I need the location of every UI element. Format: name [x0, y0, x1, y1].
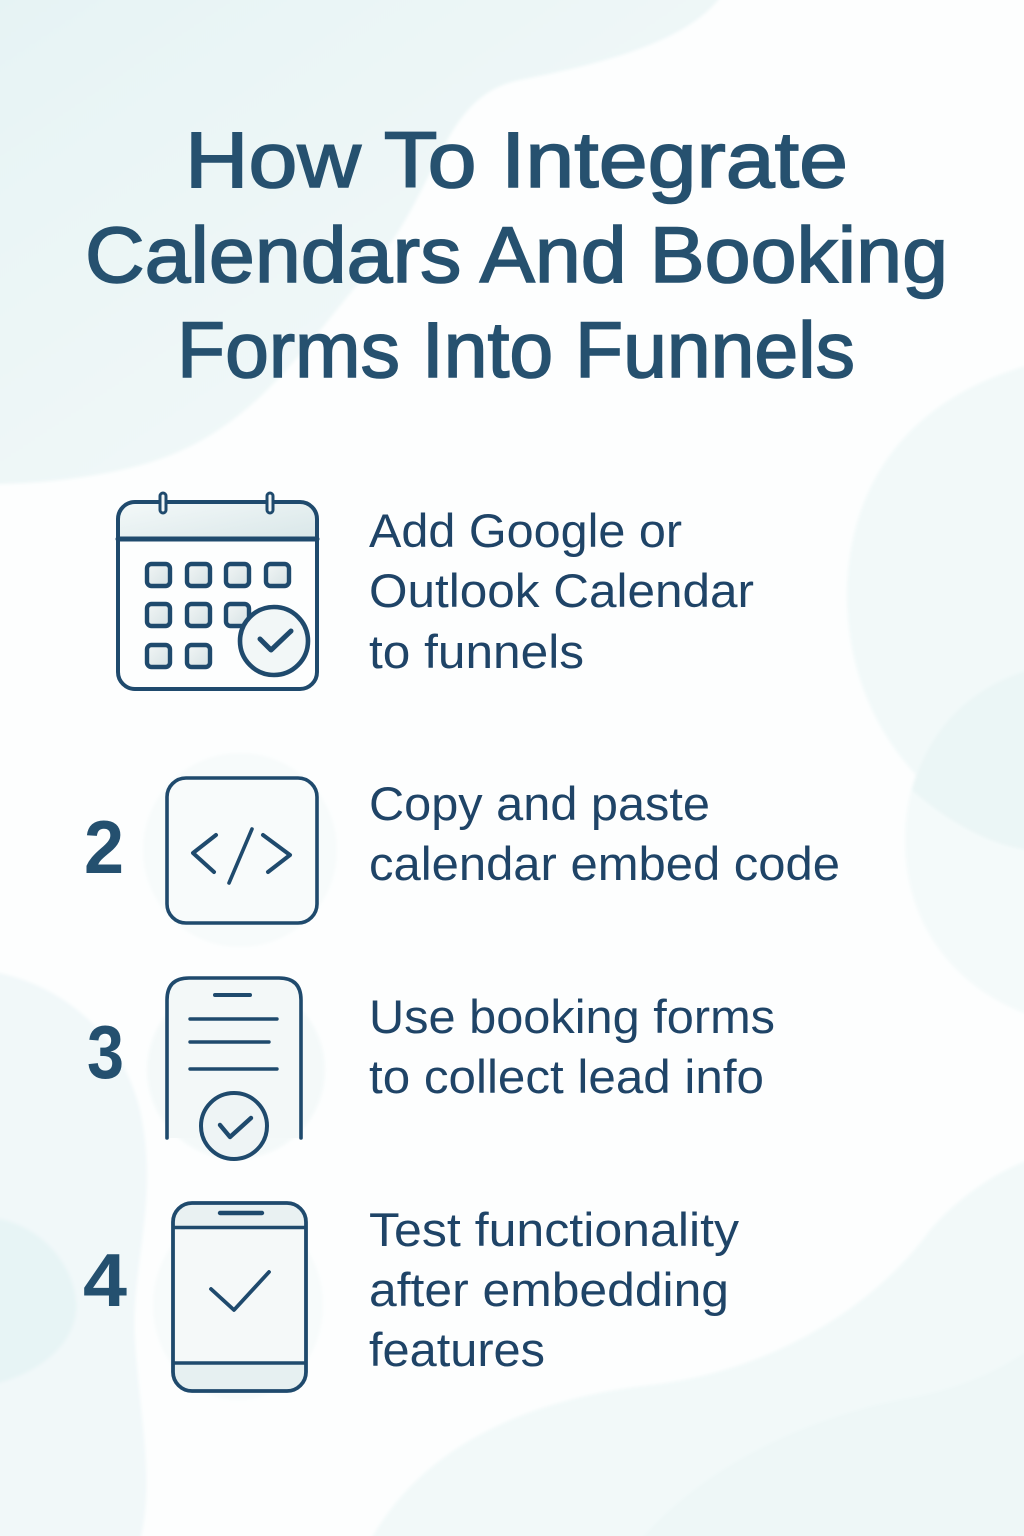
step 2 number: 2 [84, 805, 124, 889]
title [85, 115, 948, 394]
step 4 text: after embedding [369, 1263, 729, 1316]
step 4 text: features [369, 1323, 545, 1376]
step 3 text [369, 990, 775, 1103]
step 2 text: Copy and paste [369, 777, 710, 830]
step 3 number: 3 [87, 1010, 124, 1094]
step 1 text: Add Google or [369, 504, 682, 557]
step 4 text: Test functionality [369, 1203, 740, 1256]
step 1 text: Outlook Calendar [369, 564, 754, 617]
step 1 text [369, 504, 754, 678]
step 2 text [369, 777, 840, 890]
title: How To Integrate [185, 115, 848, 204]
step 2 text: calendar embed code [369, 837, 840, 890]
step 1 text: to funnels [369, 625, 584, 678]
step 3 text: to collect lead info [369, 1050, 764, 1103]
step 2 icon: code window [167, 778, 317, 923]
step 3 text: Use booking forms [369, 990, 775, 1043]
step 3 icon: form with check [167, 978, 301, 1159]
step 4 text [369, 1203, 740, 1376]
step 1 icon: calendar with check [118, 493, 317, 689]
step 4 number: 4 [83, 1238, 127, 1322]
title: Forms Into Funnels [177, 305, 855, 394]
step 4 icon: phone with check [173, 1203, 306, 1391]
title: Calendars And Booking [85, 210, 948, 299]
